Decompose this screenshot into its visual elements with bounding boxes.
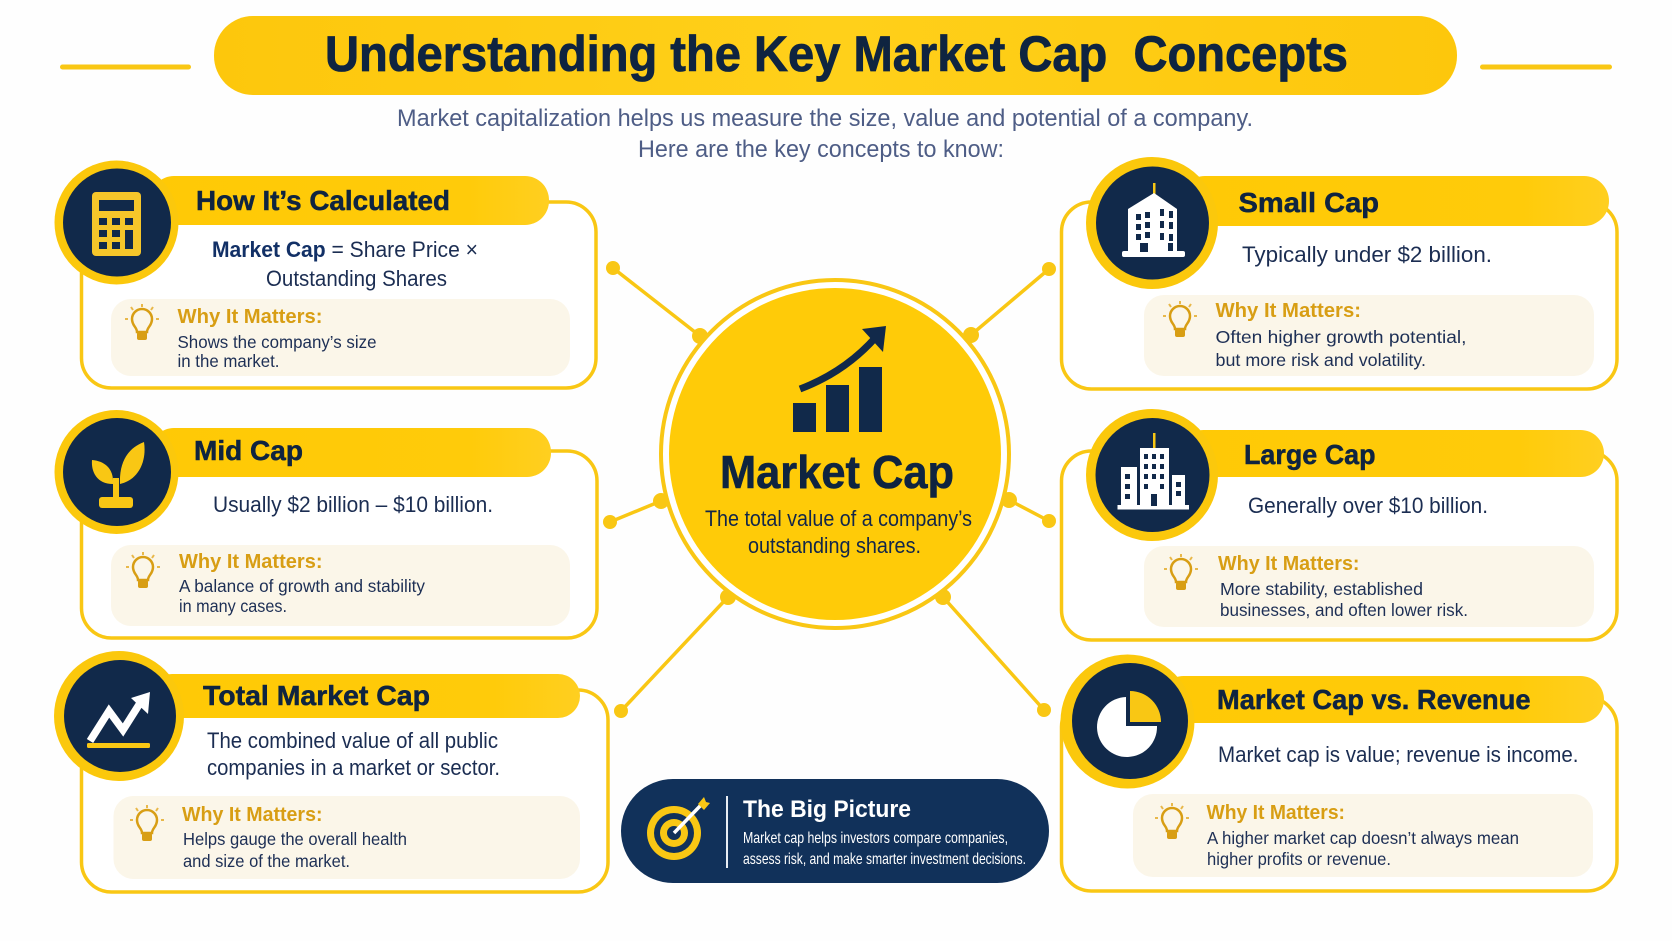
subtitle: Market capitalization helps us measure the size, value and potential of a company. <box>397 105 1253 132</box>
panel: Large Cap: Large Cap <box>1244 439 1376 470</box>
why it matters box: Why It Matters: <box>1216 300 1361 322</box>
callout: The Big Picture: assess risk, and make smarter investment decisions. <box>743 851 1026 868</box>
icon: target with arrow <box>647 797 710 860</box>
icon: sprout <box>92 442 145 508</box>
why it matters box: Why It Matters: <box>179 551 322 573</box>
why it matters box: Often higher growth potential, <box>1216 327 1466 347</box>
panel: Small Cap: Small Cap <box>1238 187 1379 218</box>
why it matters box: higher profits or revenue. <box>1207 849 1391 869</box>
panel: Large Cap: Generally over $10 billion. <box>1248 493 1488 518</box>
why it matters box: Helps gauge the overall health <box>183 829 407 849</box>
panel: Total Market Cap: companies in a market or sector. <box>207 755 500 780</box>
why it matters box: Shows the company’s size <box>178 332 376 352</box>
icon: office tower <box>1122 183 1185 257</box>
central circle: Market Cap: outstanding shares. <box>748 533 921 558</box>
icon: light bulb <box>1164 554 1198 590</box>
panel: How It's Calculated: Outstanding Shares <box>266 266 447 291</box>
why it matters box: A higher market cap doesn’t always mean <box>1207 828 1519 848</box>
callout: The Big Picture: Market cap helps investors compare companies, <box>743 830 1008 847</box>
why it matters box <box>111 299 570 376</box>
why it matters box: More stability, established <box>1220 579 1423 599</box>
panel: Mid Cap: Usually $2 billion – $10 billion. <box>213 492 493 517</box>
callout: The Big Picture: The Big Picture <box>743 796 911 823</box>
panel: Small Cap <box>1062 157 1617 389</box>
panel: Total Market Cap <box>54 651 608 892</box>
central circle: Market Cap: The total value of a company’s <box>705 506 972 531</box>
panel: How It's Calculated <box>54 160 596 388</box>
panel: Small Cap: Typically under $2 billion. <box>1242 242 1492 267</box>
icon: light bulb <box>1163 301 1197 337</box>
icon: light bulb <box>125 304 159 340</box>
why it matters box <box>111 545 570 626</box>
why it matters box <box>114 796 580 879</box>
icon: city buildings <box>1118 433 1189 510</box>
panel: How It's Calculated: Market Cap = Share Price × <box>212 237 478 262</box>
panel: Market Cap vs. Revenue <box>1060 654 1617 891</box>
why it matters box: in the market. <box>178 351 280 371</box>
icon: light bulb <box>130 805 164 841</box>
panel: How It's Calculated: How It’s Calculated <box>196 185 450 216</box>
panel: Total Market Cap: Total Market Cap <box>203 680 430 711</box>
why it matters box: Why It Matters: <box>178 306 322 328</box>
why it matters box: and size of the market. <box>183 851 350 871</box>
central circle: Market Cap <box>661 280 1009 628</box>
icon: calculator <box>92 192 141 256</box>
icon: light bulb <box>1155 803 1189 839</box>
why it matters box: in many cases. <box>179 596 287 616</box>
why it matters box <box>1133 794 1593 877</box>
subtitle: Here are the key concepts to know: <box>638 136 1004 163</box>
callout: The Big Picture <box>621 779 1049 883</box>
why it matters box: Why It Matters: <box>1206 802 1345 824</box>
panel: Market Cap vs. Revenue: Market Cap vs. Revenue <box>1217 684 1530 715</box>
icon: trend line arrow <box>87 692 150 748</box>
panel: Large Cap <box>1062 409 1617 640</box>
title banner <box>60 16 1612 95</box>
icon: rising bar chart <box>793 326 886 432</box>
why it matters box: businesses, and often lower risk. <box>1220 600 1468 620</box>
subtitle <box>397 105 1253 163</box>
panel: Mid Cap: Mid Cap <box>194 435 303 466</box>
why it matters box: Why It Matters: <box>1218 553 1360 575</box>
icon: light bulb <box>126 552 160 588</box>
panel: Total Market Cap: The combined value of all public <box>207 728 498 753</box>
connector lines <box>603 261 1056 718</box>
why it matters box: Why It Matters: <box>182 804 322 826</box>
panel: Mid Cap <box>54 410 597 638</box>
icon: pie chart <box>1097 691 1161 757</box>
why it matters box: A balance of growth and stability <box>179 576 425 596</box>
why it matters box <box>1144 295 1594 376</box>
why it matters box: but more risk and volatility. <box>1216 350 1426 370</box>
central circle: Market Cap: Market Cap <box>720 446 954 498</box>
panel: Market Cap vs. Revenue: Market cap is value; revenue is income. <box>1218 742 1578 767</box>
why it matters box <box>1144 546 1594 627</box>
title banner: Understanding the Key Market Cap Concepts <box>325 26 1348 82</box>
